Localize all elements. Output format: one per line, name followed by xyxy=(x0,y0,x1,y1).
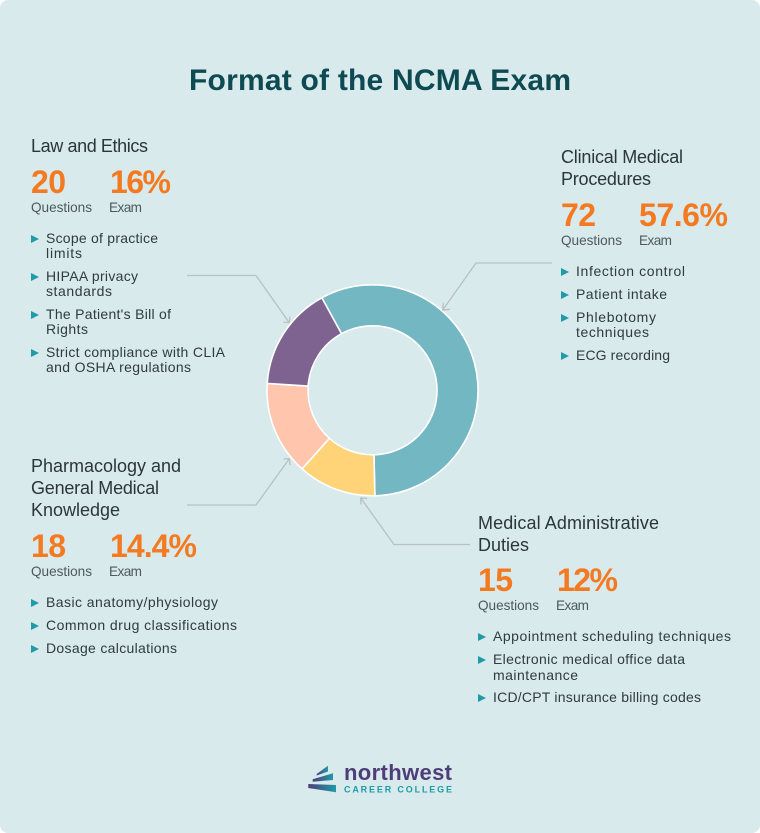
bullet list: ECG recording xyxy=(576,347,670,363)
bullet list: Strict compliance with CLIA xyxy=(46,344,226,360)
heading: pharmacology xyxy=(31,456,181,520)
bullet list: Appointment scheduling techniques xyxy=(493,628,731,644)
panel: law and ethics xyxy=(31,136,226,375)
stat: 14.4% exam: 14.4% xyxy=(110,528,197,564)
bullet list xyxy=(31,230,226,375)
heading: pharmacology: General Medical xyxy=(31,478,159,498)
bullet list: ICD/CPT insurance billing codes xyxy=(493,689,701,705)
bullet list: limits xyxy=(46,245,82,261)
stat: 15 questions xyxy=(478,562,539,613)
bullet list: techniques xyxy=(576,324,649,340)
stat: 14.4% exam xyxy=(109,528,197,579)
stat: 18 questions: Questions xyxy=(31,564,92,579)
wordmark: northwest xyxy=(344,760,453,785)
stat: 57.6% exam: 57.6% xyxy=(639,197,728,233)
bullet list: The Patient's Bill of xyxy=(46,306,171,322)
stat: 15 questions: Questions xyxy=(478,598,539,613)
heading: medical administrative duties: Duties xyxy=(478,535,529,555)
heading: law and ethics: Law and Ethics xyxy=(31,136,148,156)
bullet list: Infection control xyxy=(576,263,685,279)
bullet list: and OSHA regulations xyxy=(46,359,191,375)
segment: law and ethics 16% xyxy=(267,298,342,386)
stat: 20 questions: Questions xyxy=(31,200,92,215)
panel: medical administrative duties xyxy=(478,513,731,705)
heading: medical administrative duties: Medical Administrative xyxy=(478,513,659,533)
stat: 12% exam: 12% xyxy=(557,562,618,598)
stat: 14.4% exam: Exam xyxy=(109,564,142,579)
arrow: pharmacology xyxy=(187,459,290,505)
heading: clinical medical procedures: Procedures xyxy=(561,169,651,189)
bullet list xyxy=(31,594,237,656)
arrow: medical administrative duties xyxy=(361,498,470,544)
stat: 16% exam xyxy=(109,164,171,215)
bullet list: Electronic medical office data xyxy=(493,651,685,667)
segment: medical administrative duties 12% xyxy=(302,438,375,496)
heading: medical administrative duties xyxy=(478,513,659,555)
arrow: clinical medical procedures xyxy=(443,263,552,310)
donut chart xyxy=(267,285,478,496)
bullet list: Phlebotomy xyxy=(576,309,656,325)
stat: 72 questions xyxy=(561,197,622,248)
stat: 18 questions xyxy=(31,528,92,579)
panel: clinical medical procedures xyxy=(561,147,728,363)
bullet list: Basic anatomy/physiology xyxy=(46,594,218,610)
bullet list xyxy=(478,628,731,705)
tagline: CAREER COLLEGE xyxy=(344,784,452,794)
heading: pharmacology: Knowledge xyxy=(31,500,120,520)
heading: pharmacology: Pharmacology and xyxy=(31,456,181,476)
arrow: law and ethics xyxy=(187,276,290,323)
bullet list: Rights xyxy=(46,321,88,337)
bullet list: Scope of practice xyxy=(46,230,158,246)
segment: pharmacology 14.4% xyxy=(267,383,329,469)
bullet list: standards xyxy=(46,283,112,299)
stat: 15 questions: 15 xyxy=(478,562,513,598)
stat: 16% exam: 16% xyxy=(110,164,171,200)
stat: 20 questions xyxy=(31,164,92,215)
stat: 12% exam xyxy=(556,562,618,613)
stat: 16% exam: Exam xyxy=(109,200,142,215)
title: Format of the NCMA Exam xyxy=(189,64,571,97)
stat: 12% exam: Exam xyxy=(556,598,589,613)
stat: 18 questions: 18 xyxy=(31,528,66,564)
bullet list: maintenance xyxy=(493,667,578,683)
stat: 20 questions: 20 xyxy=(31,164,66,200)
heading: clinical medical procedures: Clinical Medical xyxy=(561,147,683,167)
stat: 72 questions: 72 xyxy=(561,197,596,233)
panel: pharmacology and general medical knowledge xyxy=(31,456,237,656)
bullet list: HIPAA privacy xyxy=(46,268,138,284)
logo: northwest career college xyxy=(308,760,453,794)
stat: 57.6% exam: Exam xyxy=(639,233,672,248)
bullet list xyxy=(561,263,685,363)
segment: clinical medical procedures 57.6% xyxy=(322,285,478,496)
icon: logo wedges xyxy=(308,766,336,792)
heading: clinical medical procedures xyxy=(561,147,683,189)
bullet list: Common drug classifications xyxy=(46,617,237,633)
bullet list: Patient intake xyxy=(576,286,667,302)
bullet list: Dosage calculations xyxy=(46,640,177,656)
stat: 72 questions: Questions xyxy=(561,233,622,248)
